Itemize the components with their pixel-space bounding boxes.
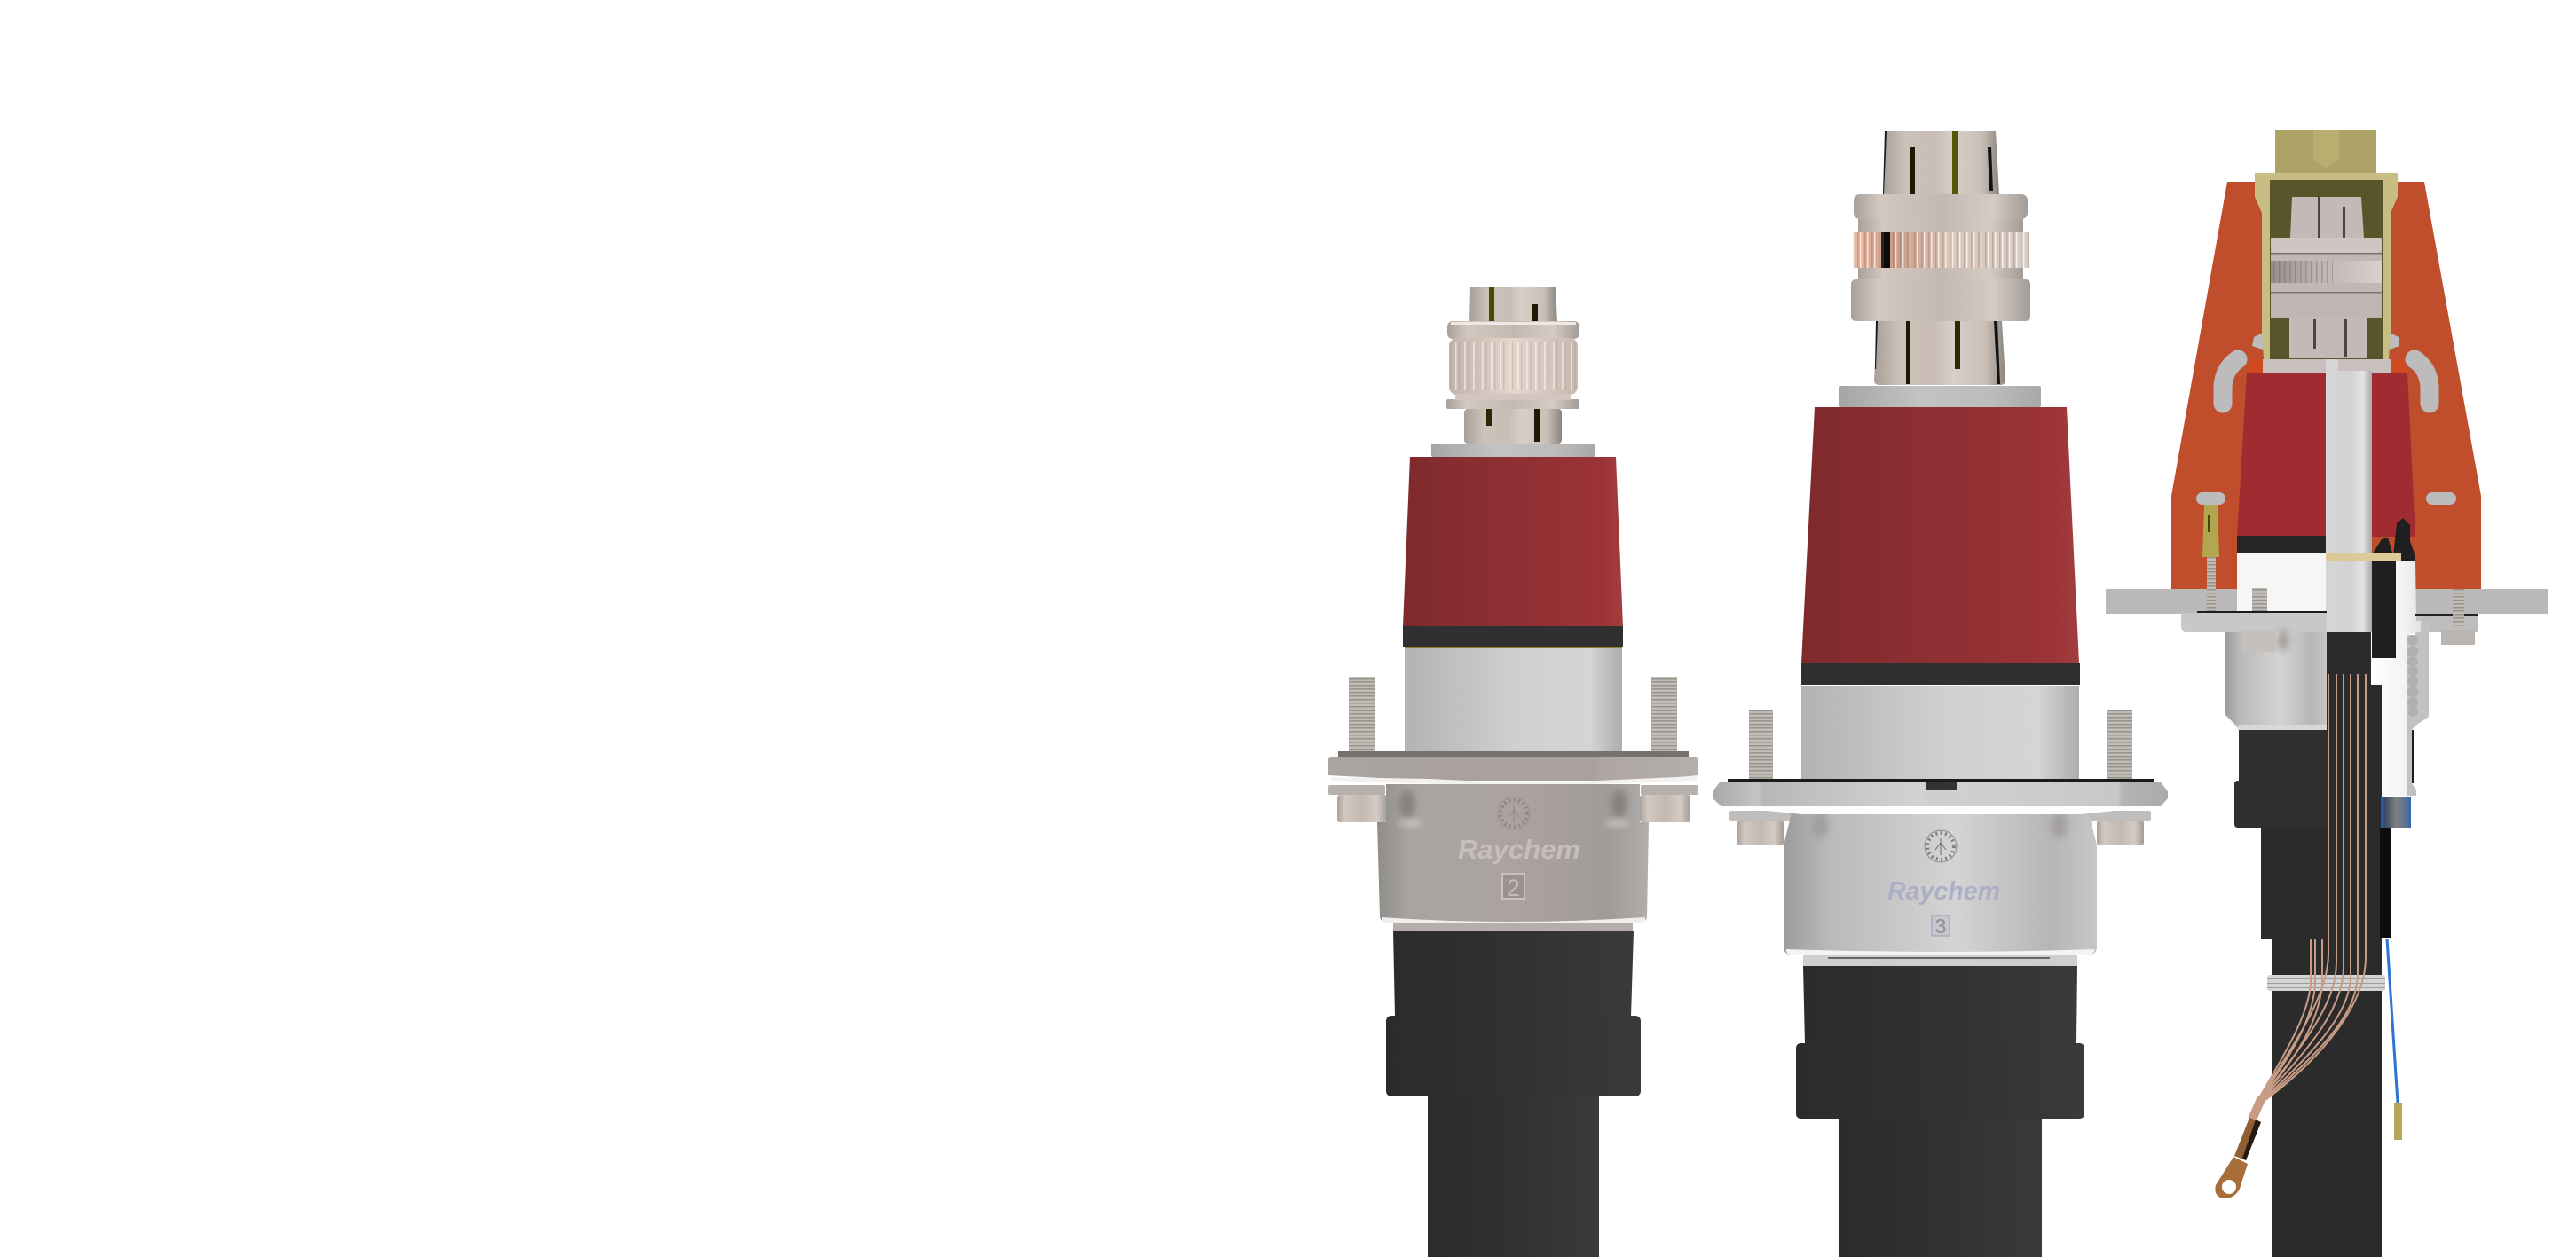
silver hose clamp <box>2267 975 2385 991</box>
Raychem wordmark: Raychem <box>1458 834 1580 865</box>
blue earth wire <box>2387 939 2398 1103</box>
flange nuts <box>1737 821 2144 845</box>
wire bundle to lug <box>2252 1097 2262 1120</box>
flange nuts <box>1337 795 1690 822</box>
grey insulating disk <box>1839 386 2041 407</box>
red sleeve cut <box>2237 373 2415 537</box>
white stress cone <box>2372 561 2421 796</box>
upper slotted contact tube <box>1469 287 1557 323</box>
mounting flange <box>1713 782 2168 821</box>
right threaded stud <box>1651 677 1677 752</box>
lower slotted contact tube <box>1874 321 2005 385</box>
black cable <box>1839 1119 2042 1257</box>
blue end cap <box>2381 797 2411 828</box>
size mark 2 <box>1502 874 1524 901</box>
mounting flange <box>1328 751 1698 795</box>
cut flange left half <box>2181 613 2327 632</box>
lower collar <box>1851 279 2030 321</box>
housing neck <box>2238 725 2327 730</box>
black band <box>1403 626 1623 647</box>
grey central conductor tube <box>2326 359 2372 632</box>
flange nut <box>2242 630 2276 652</box>
circular logo stamp <box>1925 830 1957 862</box>
black cable core <box>2261 632 2382 1257</box>
orange-red base ends <box>2247 359 2407 373</box>
lower groove <box>1858 268 2023 279</box>
white insulation <box>2237 553 2326 612</box>
grey bulkhead plate <box>2106 589 2548 614</box>
metal neck <box>1803 955 2077 966</box>
small grey tabs <box>2252 333 2399 350</box>
left threaded stud <box>1349 677 1375 752</box>
black cable <box>1428 1096 1599 1257</box>
tan strap <box>2326 553 2401 561</box>
gasket line <box>2197 611 2327 614</box>
upper black sleeve <box>1803 966 2077 1044</box>
red semi-conductive sleeve <box>1403 457 1623 626</box>
black band <box>1801 663 2080 685</box>
metal neck <box>1393 923 1633 931</box>
size mark 2: 2 <box>1507 875 1520 901</box>
copper knurled ring <box>1853 232 2029 268</box>
upper collar <box>1854 194 2028 219</box>
brass housing and top terminal <box>2255 130 2398 359</box>
red semi-conductive sleeve <box>1801 407 2079 663</box>
yellow seam <box>1405 647 1622 648</box>
black semi-conductive layer <box>2372 518 2415 658</box>
collar inside housing <box>2271 238 2382 318</box>
black collar <box>1386 1016 1641 1096</box>
cutaway joint inside orange boot <box>2106 130 2548 1257</box>
orange rubber boot <box>2171 182 2481 589</box>
right flange and screw <box>2415 589 2478 645</box>
upper black sleeve half <box>2239 730 2327 781</box>
upper black sleeve <box>1393 931 1634 1017</box>
lower slotted contact tube <box>1464 409 1562 444</box>
metal housing with Raychem mark <box>1377 784 1649 923</box>
copper shield wires <box>2260 674 2366 1100</box>
Raychem wordmark: Raychem <box>1887 877 2000 906</box>
left curved slot <box>2223 359 2238 404</box>
inner center stud <box>2252 588 2267 611</box>
size mark 3: 3 <box>1935 915 1946 938</box>
horizontal slots <box>2196 492 2456 505</box>
silver insulation body <box>1405 648 1622 752</box>
metal housing with Raychem mark <box>1726 806 2156 955</box>
black collar <box>1796 1043 2084 1119</box>
connector: small joint, Raychem 2 <box>1328 287 1698 1257</box>
base disk <box>2263 359 2391 373</box>
upper slotted contact tube <box>1883 131 1999 194</box>
right curved slot <box>2415 359 2430 404</box>
black outer tail <box>2380 828 2391 938</box>
collar groove <box>1858 219 2023 268</box>
grey insulating disk <box>1431 444 1595 457</box>
right threaded stud <box>2107 710 2132 779</box>
copper ring lug <box>2215 1118 2261 1198</box>
black gasket <box>1728 779 2154 783</box>
knurled shear-bolt collar <box>1446 321 1579 409</box>
black band <box>2237 536 2326 553</box>
circular logo stamp <box>1498 797 1530 829</box>
connector: large joint, Raychem 3 <box>1713 131 2168 1257</box>
housing dent <box>2278 630 2288 651</box>
left threaded stud <box>1749 710 1773 779</box>
brass wire terminal <box>2394 1103 2402 1140</box>
silver insulation body <box>1801 686 2079 780</box>
grey cross-section rim <box>2405 614 2431 796</box>
cut housing <box>2225 632 2327 727</box>
black collar half <box>2234 781 2327 828</box>
contact tube inside housing <box>2289 197 2367 358</box>
size mark 3 <box>1932 915 1950 938</box>
brass insert and screw <box>2202 505 2219 612</box>
